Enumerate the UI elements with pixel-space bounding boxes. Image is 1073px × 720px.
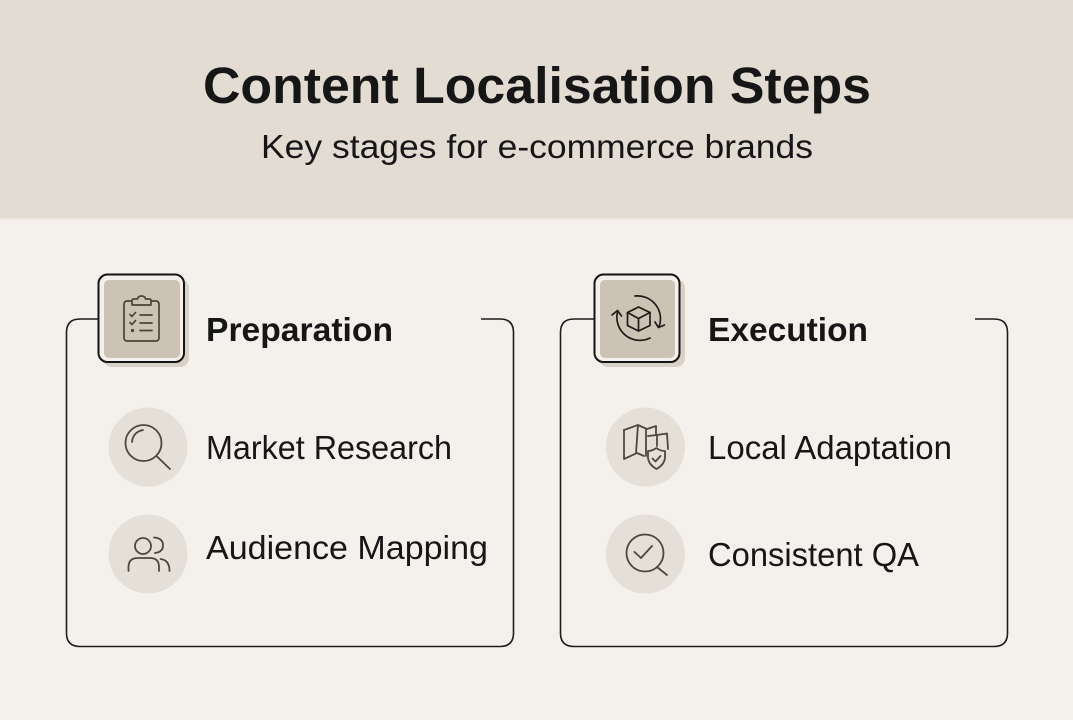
- item: market research: [108, 408, 452, 486]
- header band: [0, 0, 1073, 220]
- item: local adaptation: [606, 408, 952, 486]
- icon: clipboard checklist: [98, 274, 189, 367]
- item: consistent qa: [606, 514, 919, 594]
- label: audience mapping: Audience Mapping: [206, 529, 488, 566]
- label: consistent qa: Consistent QA: [708, 536, 919, 573]
- title: Content Localisation Steps: [203, 57, 871, 114]
- label: market research: Market Research: [206, 429, 452, 466]
- icon: people: [108, 514, 188, 594]
- panel outline: [560, 319, 1008, 646]
- icon: magnifying glass: [108, 408, 188, 486]
- icon: box with rotation arrows: [594, 274, 685, 367]
- panel outline: [66, 319, 514, 646]
- item: audience mapping: [108, 514, 488, 594]
- label: local adaptation: Local Adaptation: [708, 429, 952, 466]
- heading: preparation: Preparation: [206, 312, 393, 349]
- icon: map with shield: [606, 408, 685, 486]
- panel: preparation: [66, 274, 514, 646]
- heading: execution: Execution: [708, 312, 868, 349]
- panel: execution: [560, 274, 1008, 646]
- icon: magnifier with check: [606, 514, 685, 594]
- subtitle: Key stages for e-commerce brands: [261, 129, 813, 166]
